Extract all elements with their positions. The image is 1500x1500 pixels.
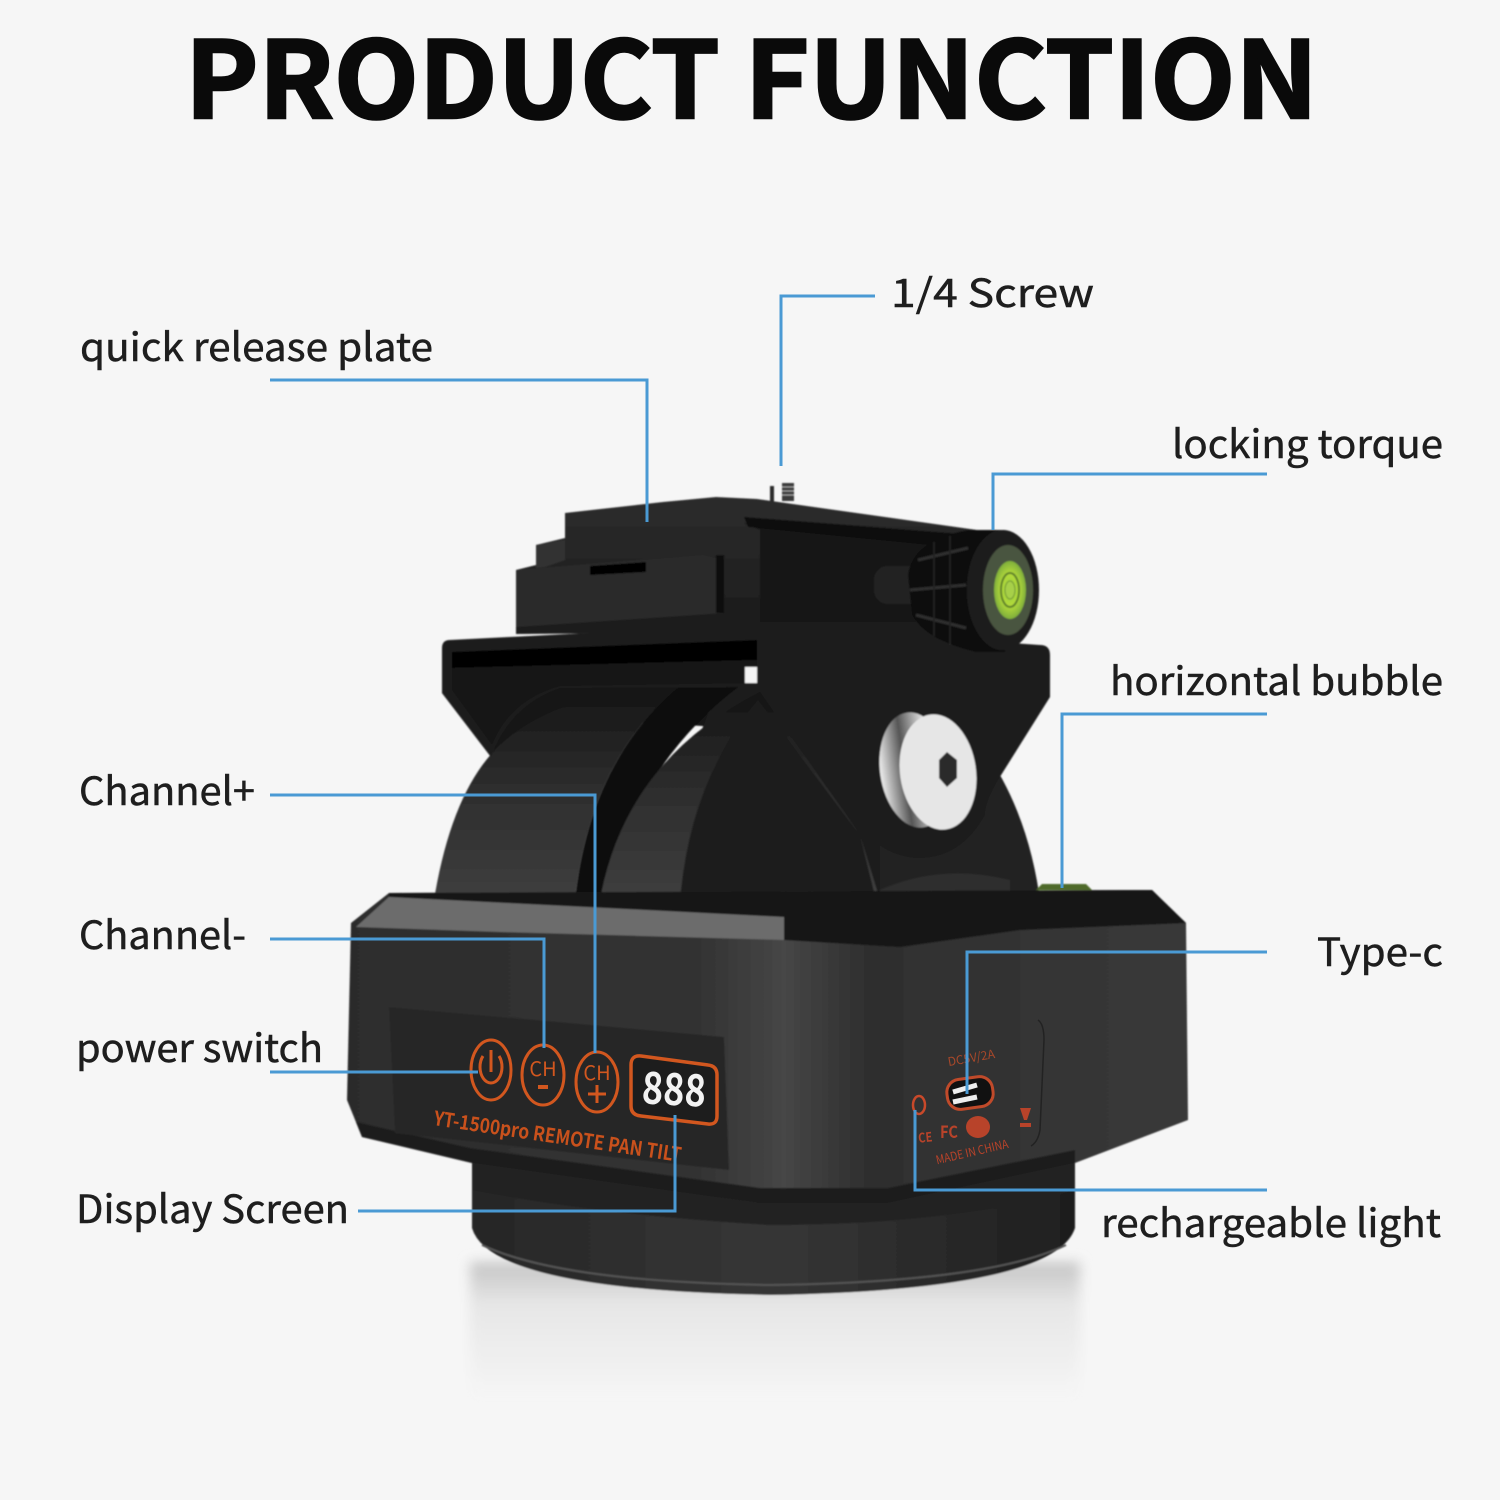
display screen: 888: [641, 1052, 708, 1120]
callout: rechargeable light: rechargeable light: [1101, 1193, 1441, 1249]
base lower bevel: [356, 1122, 1075, 1203]
product: pan tilt head: [347, 483, 1188, 1400]
callout: 1/4 screw: [781, 263, 1094, 466]
callout: type-c: Type-c: [1317, 922, 1443, 978]
certification marks: MADE IN CHINA: [934, 1135, 1011, 1168]
control panel: [389, 1007, 729, 1170]
tilt axis bolt: [872, 708, 984, 835]
callout: power switch: power switch: [76, 1018, 323, 1074]
locking knob: [874, 530, 1039, 652]
callout: horizontal bubble: [1062, 651, 1443, 888]
base body: [347, 890, 1188, 1203]
callout: channel minus: Channel-: [79, 905, 246, 961]
base lit bevel: [356, 897, 784, 940]
callout: rechargeable light: [915, 1110, 1441, 1249]
quick release plate: [516, 497, 977, 640]
icon: channel plus: CH: [583, 1057, 611, 1086]
callout: locking torque: locking torque: [1172, 414, 1443, 470]
right arch: [600, 692, 880, 900]
callout: display screen: [76, 1115, 675, 1235]
callout: channel plus: [79, 761, 595, 1053]
base top dark edge: [389, 890, 1186, 947]
callout: horizontal bubble: horizontal bubble: [1110, 651, 1443, 707]
icon: channel minus: [522, 1045, 564, 1105]
wedge backing behind arches: [442, 650, 770, 757]
callout: type-c: [967, 922, 1443, 1094]
icon: power switch: [471, 1040, 511, 1100]
callout: 1/4 screw: 1/4 Screw: [891, 263, 1094, 319]
port panel: [913, 1020, 1044, 1168]
callout: display screen: Display Screen: [76, 1179, 349, 1235]
model text: YT-1500pro REMOTE PAN TILT: [431, 1102, 684, 1168]
left arch: [434, 686, 680, 900]
yoke arches: [434, 686, 880, 900]
yoke slot opening: [745, 667, 757, 683]
type-c port: [945, 1075, 995, 1111]
bubble level: [994, 561, 1026, 619]
callout: locking torque: [993, 414, 1443, 530]
certification marks: CE: [917, 1126, 933, 1147]
screw: [770, 483, 794, 502]
dome right of yoke: [840, 720, 1040, 900]
floor reflection: [470, 1262, 1080, 1400]
voltage text: DC5V/2A: [946, 1045, 997, 1070]
callout: quick release plate: quick release plate: [80, 317, 433, 373]
certification marks: FC: [940, 1118, 958, 1143]
dark backing between arch and yoke: [640, 680, 880, 900]
callout: channel minus: [79, 905, 544, 1048]
icon: channel plus: [576, 1052, 618, 1112]
charge light: [913, 1096, 925, 1114]
icon: channel minus: CH: [529, 1053, 557, 1082]
base ring: [472, 1150, 1075, 1295]
front clamp jaw: [516, 555, 724, 627]
dark gap between arches: [575, 686, 740, 900]
yoke bracket: [442, 625, 1050, 858]
bubble level edge: [1036, 884, 1092, 890]
certification marks: [917, 1108, 1031, 1168]
callout: channel plus: Channel+: [79, 761, 255, 817]
callout: quick release plate: [80, 317, 647, 522]
control icons: [431, 1040, 717, 1168]
